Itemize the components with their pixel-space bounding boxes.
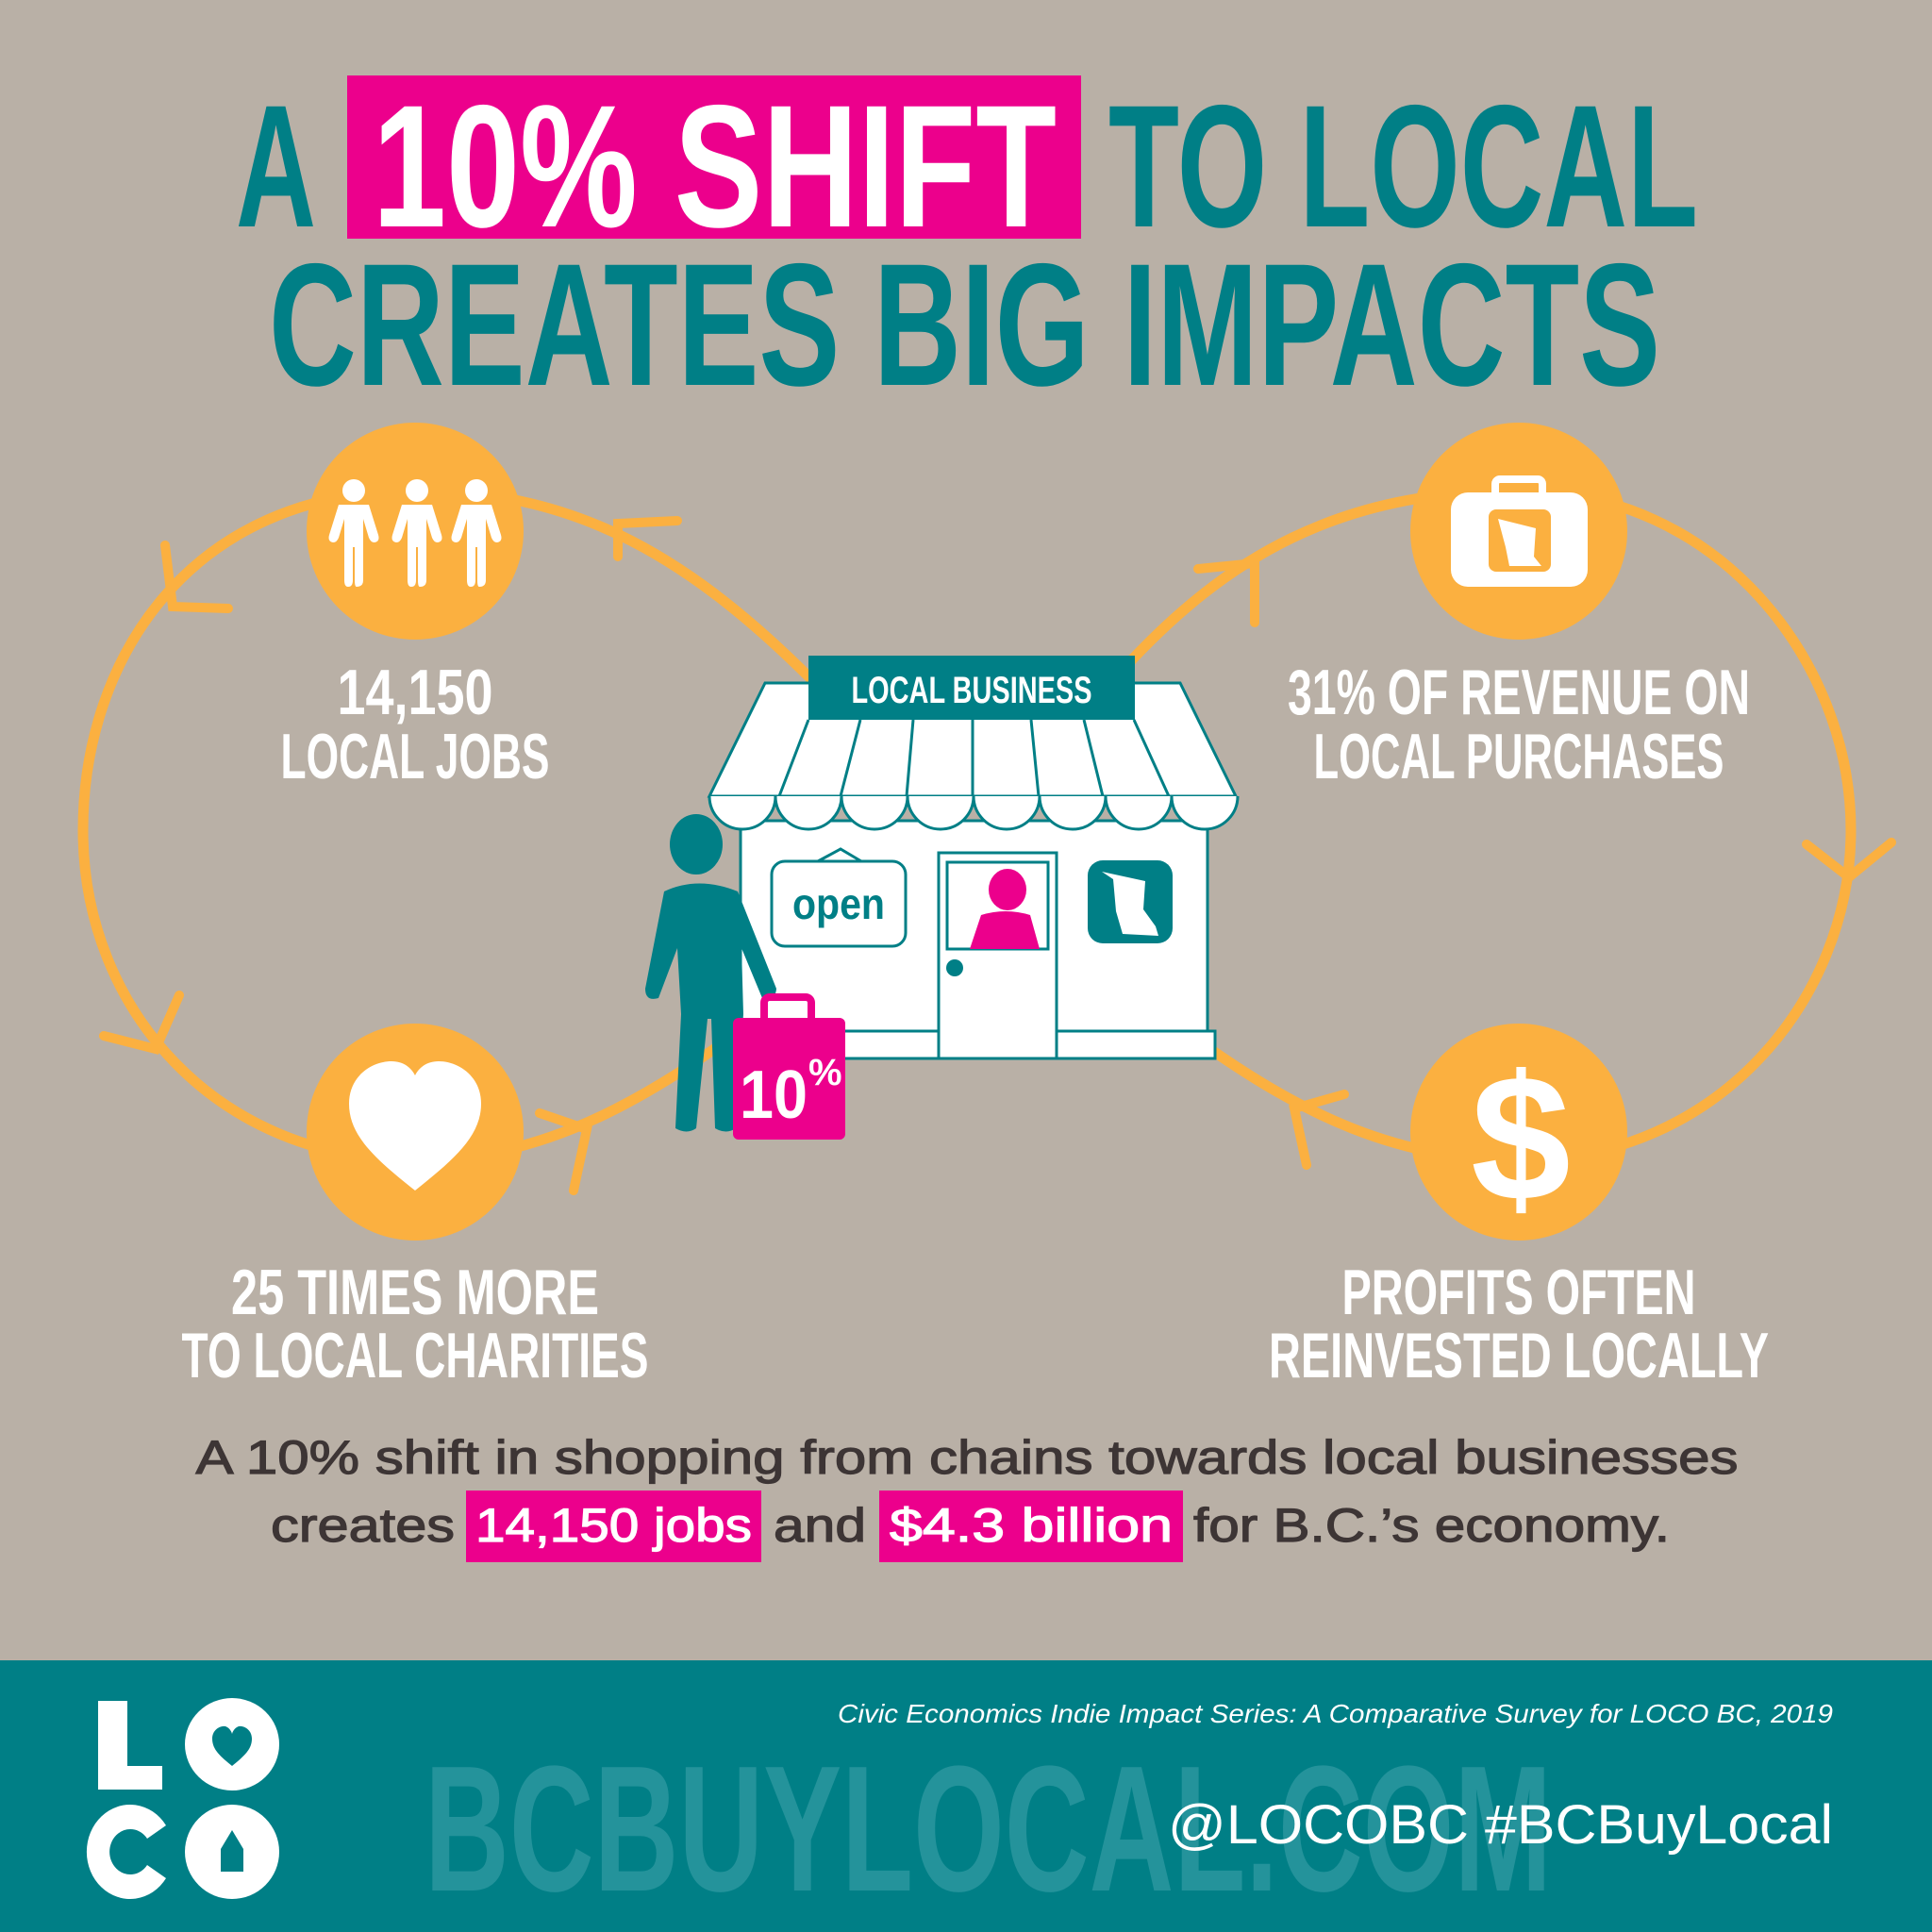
icon: dollar circle: $	[1471, 1039, 1571, 1239]
shopper	[645, 814, 776, 1132]
open sign text: open	[792, 879, 885, 928]
icon: heart circle	[307, 1024, 524, 1241]
stat labels: 25 TIMES MORE	[231, 1257, 599, 1328]
summary text: A 10% shift in shopping from chains towards local businesses	[196, 1431, 1738, 1484]
footer	[0, 1660, 1932, 1932]
summary text: 14,150 jobs	[475, 1499, 752, 1552]
shopkeeper	[970, 869, 1040, 949]
shop sign	[808, 656, 1135, 720]
summary text: and	[774, 1499, 866, 1552]
title: A	[236, 70, 316, 264]
summary text: $4.3 billion	[890, 1499, 1173, 1552]
summary text	[196, 1431, 1738, 1562]
shop illustration	[709, 683, 1238, 1058]
stat labels	[181, 657, 1769, 1391]
arrows	[104, 521, 1891, 1191]
shop sign: LOCAL BUSINESS	[851, 670, 1092, 711]
summary text: for B.C.’s economy.	[1193, 1499, 1670, 1552]
stat labels: 14,150	[338, 657, 492, 728]
loop path	[83, 491, 1891, 1191]
icon: briefcase circle	[1410, 423, 1627, 640]
stat labels: TO LOCAL CHARITIES	[181, 1320, 649, 1391]
LOCO logo	[87, 1698, 279, 1899]
stat labels: LOCAL JOBS	[281, 721, 549, 792]
icon: dollar circle	[1410, 1024, 1627, 1241]
shopping bag 10%: %	[808, 1052, 842, 1093]
icon: people circle	[307, 423, 524, 640]
title: 10% SHIFT	[373, 70, 1057, 264]
icon: BC badge	[1088, 860, 1173, 943]
shopping bag 10%: 10	[740, 1058, 808, 1133]
social handles: @LOCOBC #BCBuyLocal	[1168, 1794, 1833, 1856]
stat labels: PROFITS OFTEN	[1341, 1257, 1696, 1328]
summary text: creates	[271, 1499, 455, 1552]
citation: Civic Economics Indie Impact Series: A Comparative Survey for LOCO BC, 2019	[838, 1699, 1833, 1728]
title	[236, 70, 1698, 423]
shopping bag 10%	[733, 997, 845, 1140]
